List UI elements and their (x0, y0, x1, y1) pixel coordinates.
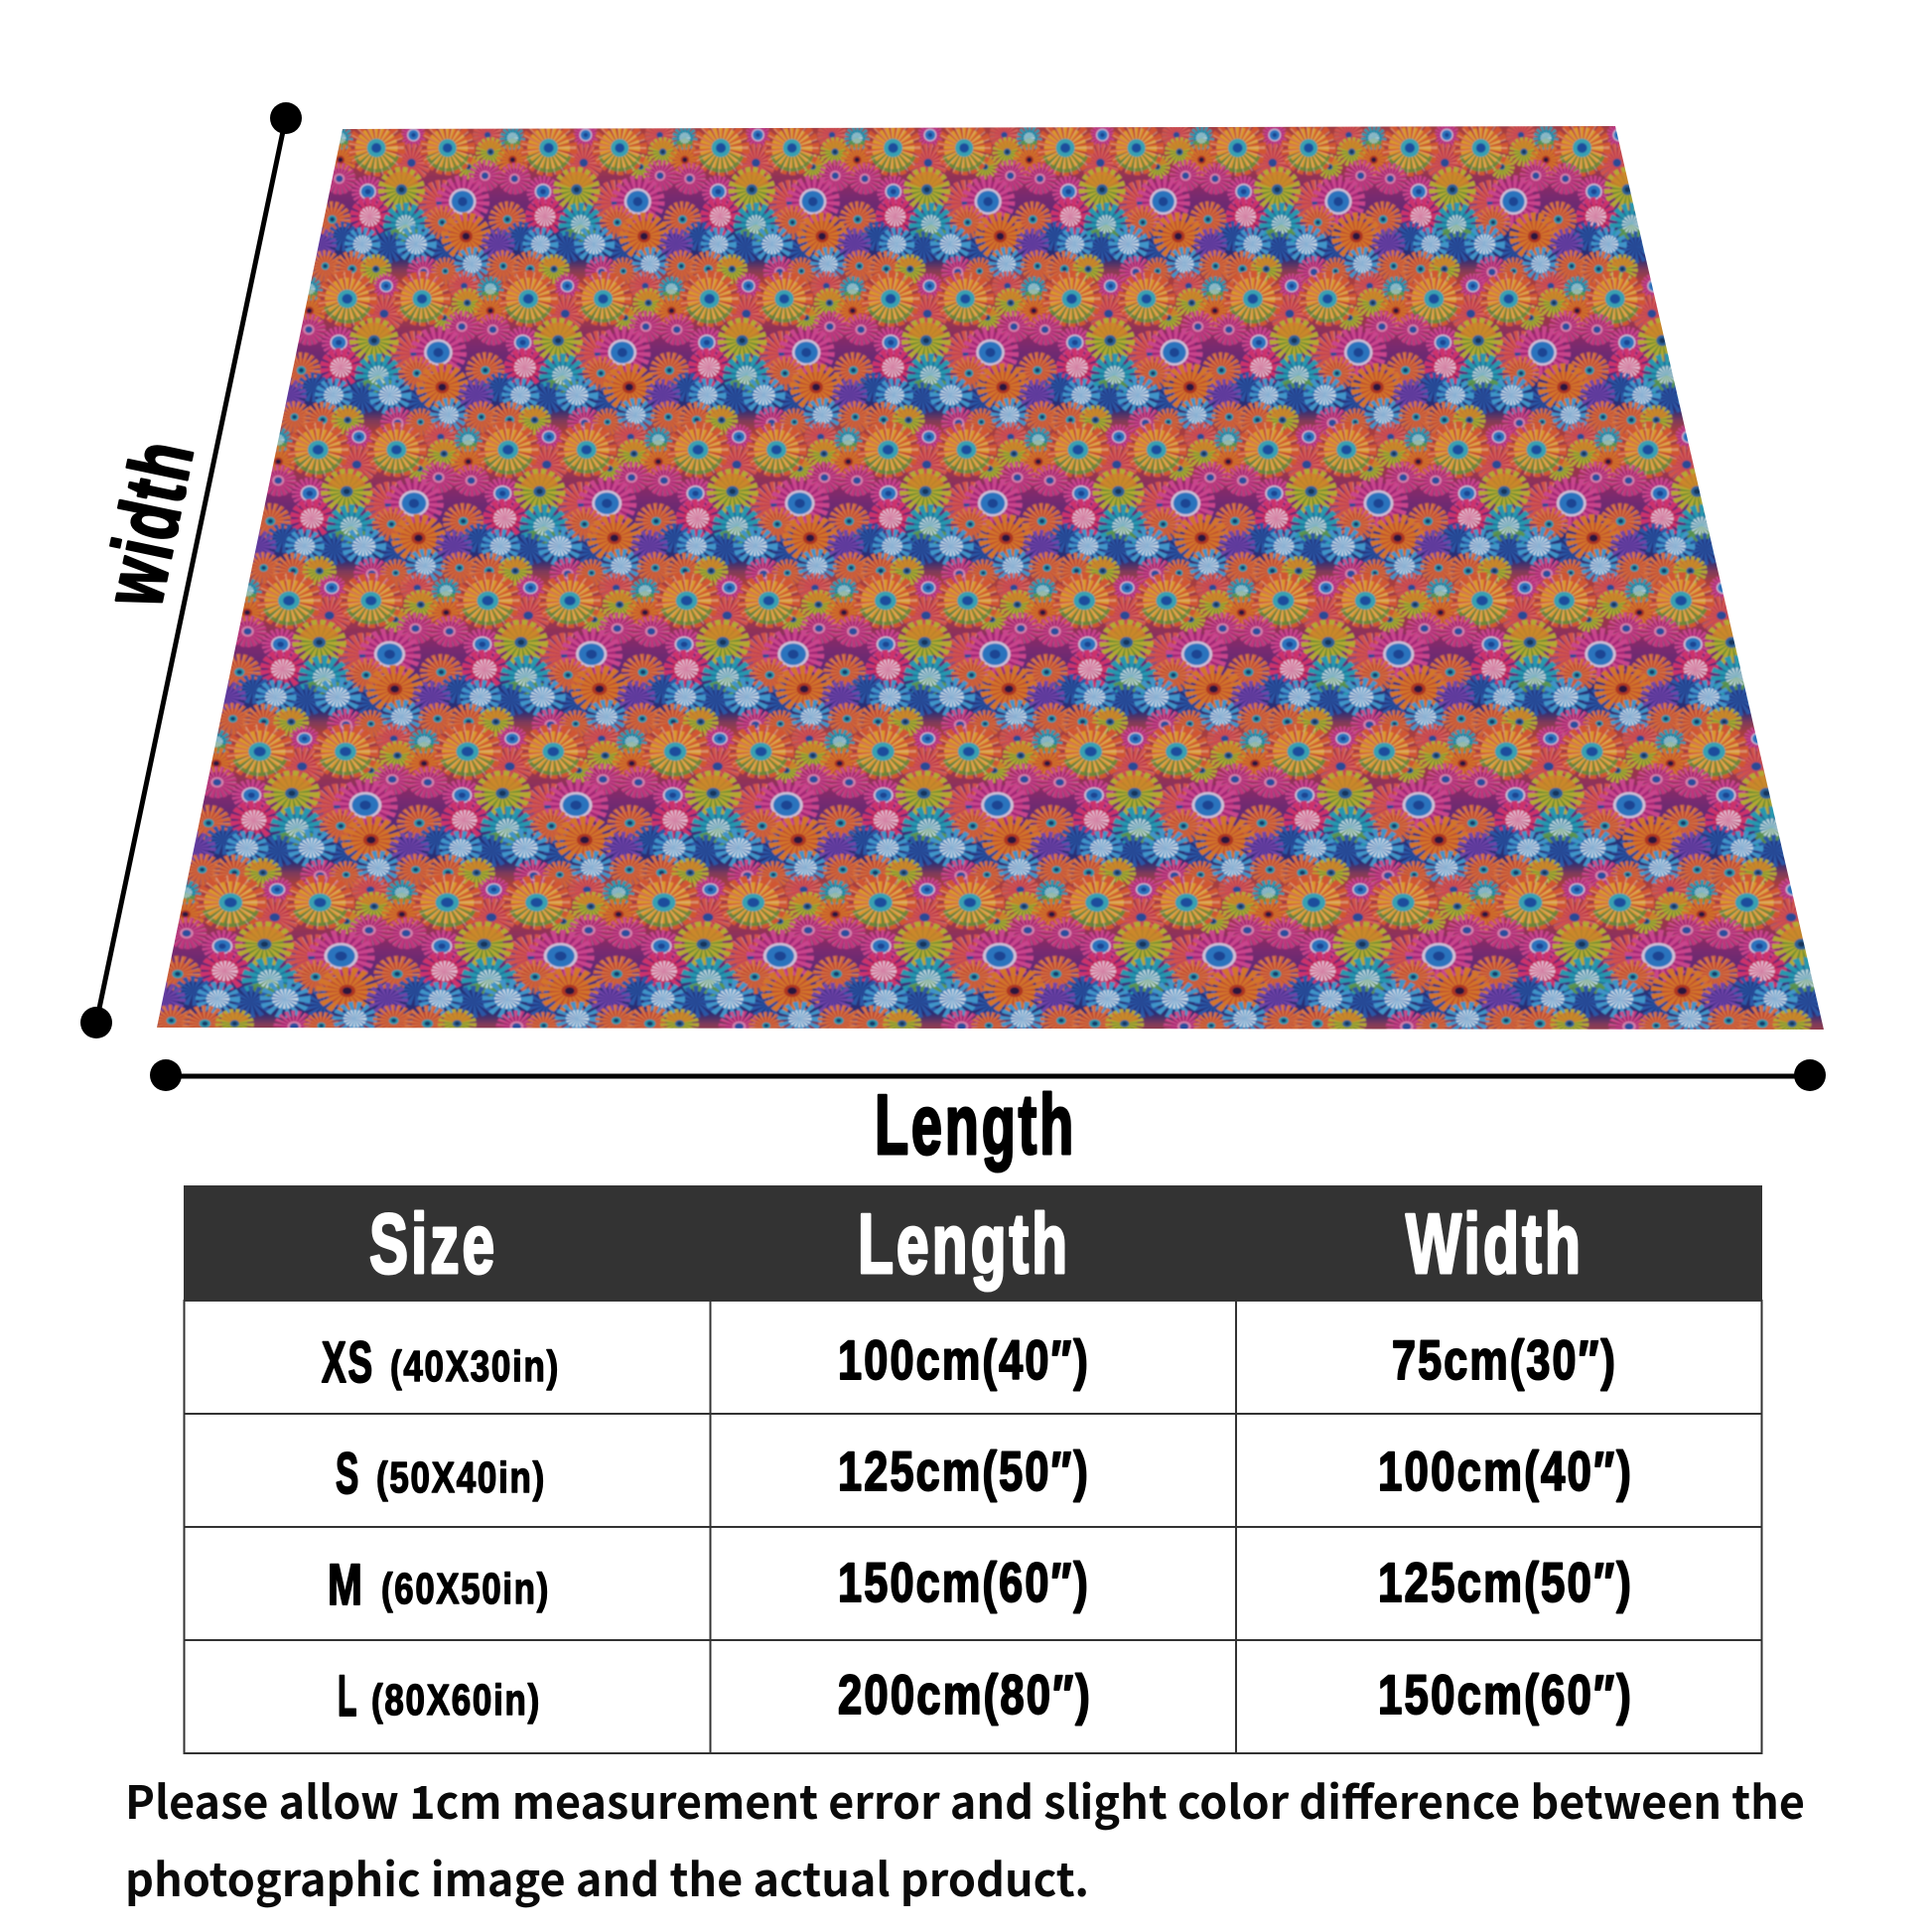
row XS: XS (322, 1330, 374, 1395)
size table (184, 1185, 1762, 1753)
header: Size: Size (369, 1197, 497, 1292)
disclaimer note: Please allow 1cm measurement error and slight color difference between the (125, 1767, 1805, 1833)
row L: 150cm(60″) (1378, 1663, 1633, 1725)
row M: 150cm(60″) (838, 1551, 1090, 1613)
row L: L (338, 1664, 358, 1728)
row XS: 100cm(40″) (838, 1328, 1090, 1391)
arrow: length dimension line with end dots (150, 1059, 1826, 1091)
table header bar (184, 1185, 1762, 1301)
row S: (50X40in) (376, 1453, 546, 1502)
row M: M (328, 1553, 364, 1617)
header: Width: Width (1406, 1197, 1584, 1292)
disclaimer note (125, 1767, 1805, 1910)
header: Length: Length (858, 1197, 1070, 1292)
row M: 125cm(50″) (1378, 1551, 1633, 1613)
row M: (60X50in) (381, 1565, 550, 1613)
row M (328, 1551, 1633, 1617)
table grid (184, 1301, 1762, 1753)
row XS: 75cm(30″) (1392, 1328, 1617, 1391)
row XS (322, 1328, 1617, 1395)
row L: 200cm(80″) (838, 1663, 1092, 1725)
row XS: (40X30in) (390, 1342, 560, 1391)
row L: (80X60in) (371, 1676, 541, 1725)
label: width: width (85, 431, 212, 615)
row S: 125cm(50″) (838, 1440, 1090, 1502)
blanket: floral tie-dye pattern (157, 126, 1824, 1030)
row S (336, 1440, 1633, 1506)
label: Length: Length (875, 1078, 1076, 1173)
row S: 100cm(40″) (1378, 1440, 1633, 1502)
row L (338, 1663, 1633, 1728)
disclaimer note: photographic image and the actual product. (125, 1845, 1089, 1910)
arrow: width dimension line with end dots (80, 102, 302, 1038)
row S: S (336, 1442, 360, 1506)
